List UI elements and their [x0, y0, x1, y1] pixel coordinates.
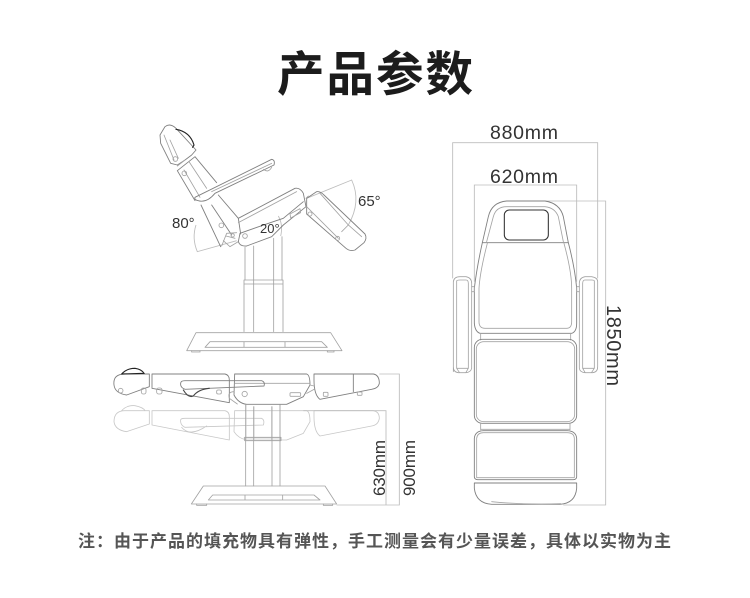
leg pad	[474, 431, 577, 480]
headrest	[482, 201, 568, 243]
back frame and pivot	[201, 195, 241, 247]
title: 产品参数	[277, 49, 475, 102]
angle arcs	[194, 180, 356, 252]
width and length dimension lines	[453, 143, 606, 505]
height dimension lines	[303, 374, 399, 505]
width labels: 880mm	[490, 122, 558, 144]
flat side view of the chair	[114, 368, 399, 505]
base	[187, 333, 342, 352]
angle labels: 80°	[172, 215, 195, 232]
height labels: 900mm	[400, 440, 419, 496]
top view of the chair	[453, 143, 606, 505]
right armrest	[577, 277, 598, 373]
angle labels	[172, 193, 381, 236]
left armrest	[453, 277, 474, 373]
height labels	[370, 440, 419, 496]
height labels: 630mm	[370, 440, 389, 496]
backrest	[474, 243, 577, 340]
angle labels: 20°	[260, 221, 280, 236]
armrest	[195, 159, 274, 201]
base	[191, 486, 337, 505]
width labels	[490, 122, 558, 188]
length label: 1850mm	[602, 305, 624, 386]
angle labels: 65°	[358, 193, 381, 210]
footnote: 注：由于产品的填充物具有弹性，手工测量会有少量误差，具体以实物为主	[78, 532, 672, 551]
leg rest section	[306, 192, 366, 251]
lifting column	[245, 405, 281, 486]
lifting column	[244, 237, 283, 332]
headrest section	[160, 125, 196, 166]
foot pad	[474, 483, 577, 504]
reclined side view of the chair	[160, 125, 366, 352]
seat pad	[474, 339, 577, 430]
backrest section	[177, 157, 217, 201]
raised table top	[114, 368, 379, 404]
seat section	[238, 188, 306, 246]
armrest in flat view	[181, 381, 264, 397]
width labels: 620mm	[490, 166, 558, 188]
lowered table ghost	[114, 405, 379, 440]
